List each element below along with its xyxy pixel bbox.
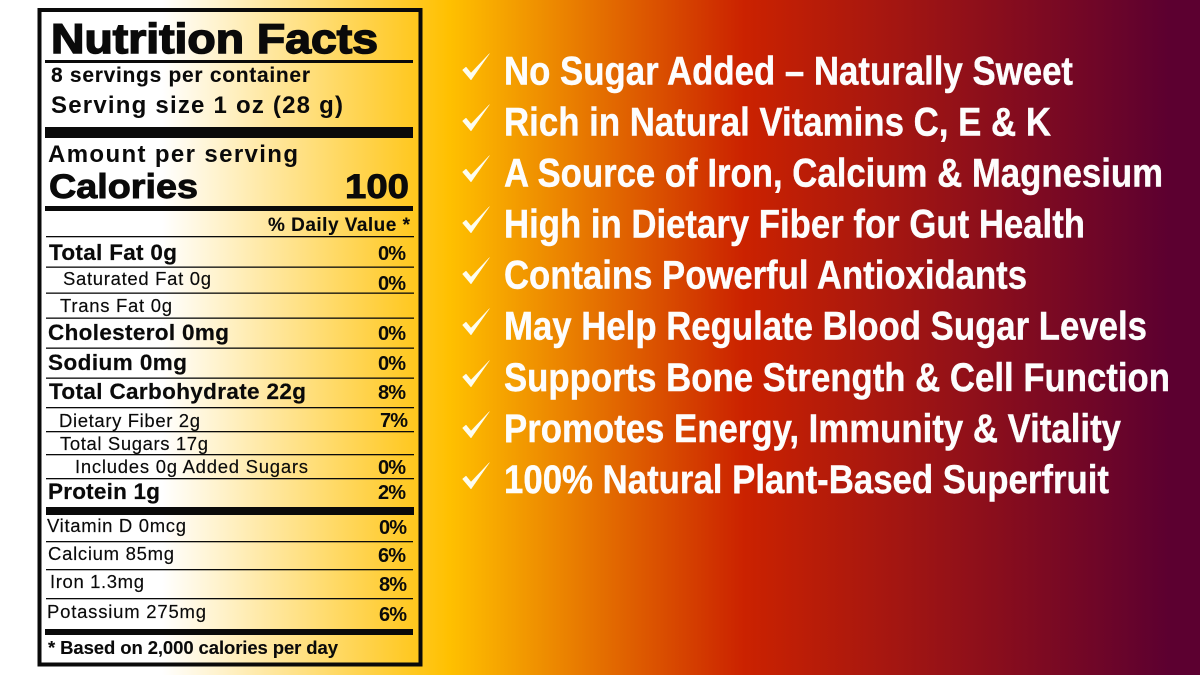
row: dietary fiber: 7%	[380, 410, 408, 432]
row: protein: 2%	[378, 482, 406, 504]
row: cholesterol	[48, 320, 406, 345]
row: potassium: 6%	[379, 604, 407, 626]
row: total carbohydrate: Total Carbohydrate 22g	[49, 379, 306, 404]
row: sodium	[48, 350, 406, 375]
footnote: * Based on 2,000 calories per day	[48, 637, 339, 658]
row: dietary fiber: Dietary Fiber 2g	[59, 410, 200, 431]
benefit 8: Promotes Energy, Immunity & Vitality	[504, 407, 1122, 451]
row: added sugars: 0%	[378, 457, 406, 479]
row: total carbohydrate: 8%	[378, 382, 406, 404]
benefit 9: 100% Natural Plant-Based Superfruit	[504, 458, 1109, 502]
benefit 2: Rich in Natural Vitamins C, E & K	[504, 100, 1051, 144]
amount per serving: Amount per serving	[48, 141, 298, 168]
row: added sugars: Includes 0g Added Sugars	[75, 456, 308, 477]
row: calcium	[48, 543, 406, 567]
calories label: Calories	[49, 168, 198, 206]
row: vitamin d: Vitamin D 0mcg	[47, 515, 186, 536]
row: total fat: 0%	[378, 243, 406, 265]
row: added sugars	[75, 456, 406, 479]
servings per container: 8 servings per container	[51, 64, 310, 87]
benefit 1: No Sugar Added – Naturally Sweet	[504, 50, 1073, 94]
row: total fat: Total Fat 0g	[49, 240, 177, 265]
row: calcium: 6%	[378, 545, 406, 567]
row: sodium: 0%	[378, 353, 406, 375]
benefit 5: Contains Powerful Antioxidants	[504, 254, 1027, 298]
row: calcium: Calcium 85mg	[48, 543, 174, 564]
title: Nutrition Facts	[51, 15, 378, 62]
row: vitamin d	[47, 515, 407, 539]
row: cholesterol: Cholesterol 0mg	[48, 320, 229, 345]
row: total sugars: Total Sugars 17g	[60, 433, 208, 454]
row: protein: Protein 1g	[48, 479, 160, 504]
row: saturated fat: Saturated Fat 0g	[63, 268, 211, 289]
daily value header: % Daily Value *	[268, 215, 411, 236]
row: potassium: Potassium 275mg	[47, 601, 206, 622]
benefits list	[462, 50, 1170, 502]
row: sodium: Sodium 0mg	[48, 350, 187, 375]
row: total fat	[49, 240, 406, 265]
benefit 4: High in Dietary Fiber for Gut Health	[504, 202, 1085, 246]
row: saturated fat	[63, 268, 406, 295]
row: potassium	[47, 601, 407, 626]
row: vitamin d: 0%	[379, 517, 407, 539]
row: dietary fiber	[59, 410, 408, 432]
row: iron: Iron 1.3mg	[50, 571, 144, 592]
row: saturated fat: 0%	[378, 273, 406, 295]
serving size: Serving size 1 oz (28 g)	[51, 92, 343, 119]
calories value: 100	[345, 168, 409, 206]
row: protein	[48, 479, 406, 504]
row: cholesterol: 0%	[378, 323, 406, 345]
row: iron: 8%	[379, 574, 407, 596]
row: trans fat: Trans Fat 0g	[60, 295, 172, 316]
row: iron	[50, 571, 407, 596]
panel: nutrition facts label	[40, 10, 420, 664]
